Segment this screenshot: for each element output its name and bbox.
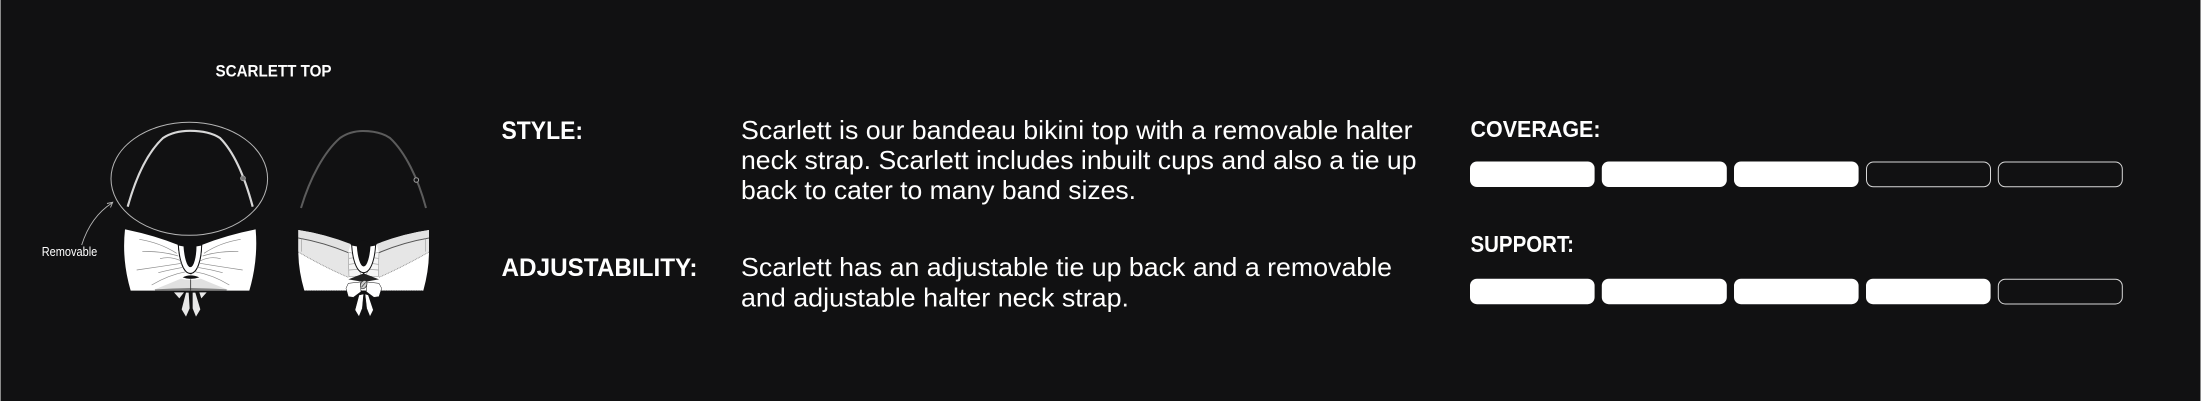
text block: Adjustability description bbox=[741, 252, 1392, 312]
heading: Coverage: COVERAGE: bbox=[1470, 116, 1600, 142]
text block: Adjustability description: and adjustable halter neck strap. bbox=[741, 282, 1129, 312]
heading: Style: STYLE: bbox=[502, 117, 583, 145]
illustration: front view of top with removable strap bbox=[111, 122, 268, 317]
back halter strap bbox=[301, 131, 426, 208]
front bandeau body bbox=[124, 229, 256, 317]
icon: arrow from Removable label to strap bbox=[82, 202, 113, 245]
front tie bbox=[174, 292, 207, 317]
back tie bow bbox=[346, 282, 382, 317]
heading: Support: SUPPORT: bbox=[1470, 231, 1574, 257]
back bandeau body bbox=[298, 230, 429, 317]
rating bar: coverage 3 of 5 bbox=[1470, 162, 2122, 187]
text block: Style description bbox=[741, 115, 1416, 205]
heading: Adjustability: ADJUSTABILITY: bbox=[502, 254, 698, 282]
illustration: back view of top bbox=[298, 131, 429, 317]
title: Scarlett Top: SCARLETT TOP bbox=[216, 62, 332, 80]
label: Removable: Removable bbox=[42, 244, 97, 259]
callout ellipse around strap bbox=[111, 122, 268, 235]
text block: Adjustability description: Scarlett has an adjustable tie up back and a removable bbox=[741, 252, 1392, 282]
text block: Style description: neck strap. Scarlett includes inbuilt cups and also a tie up bbox=[741, 145, 1416, 175]
text block: Style description: back to cater to many band sizes. bbox=[741, 175, 1136, 205]
text block: Style description: Scarlett is our bandeau bikini top with a removable halter bbox=[741, 115, 1413, 145]
rating bar: support 4 of 5 bbox=[1470, 279, 2122, 304]
back ruching beside the neckline bbox=[348, 252, 379, 277]
front halter strap bbox=[128, 131, 253, 207]
